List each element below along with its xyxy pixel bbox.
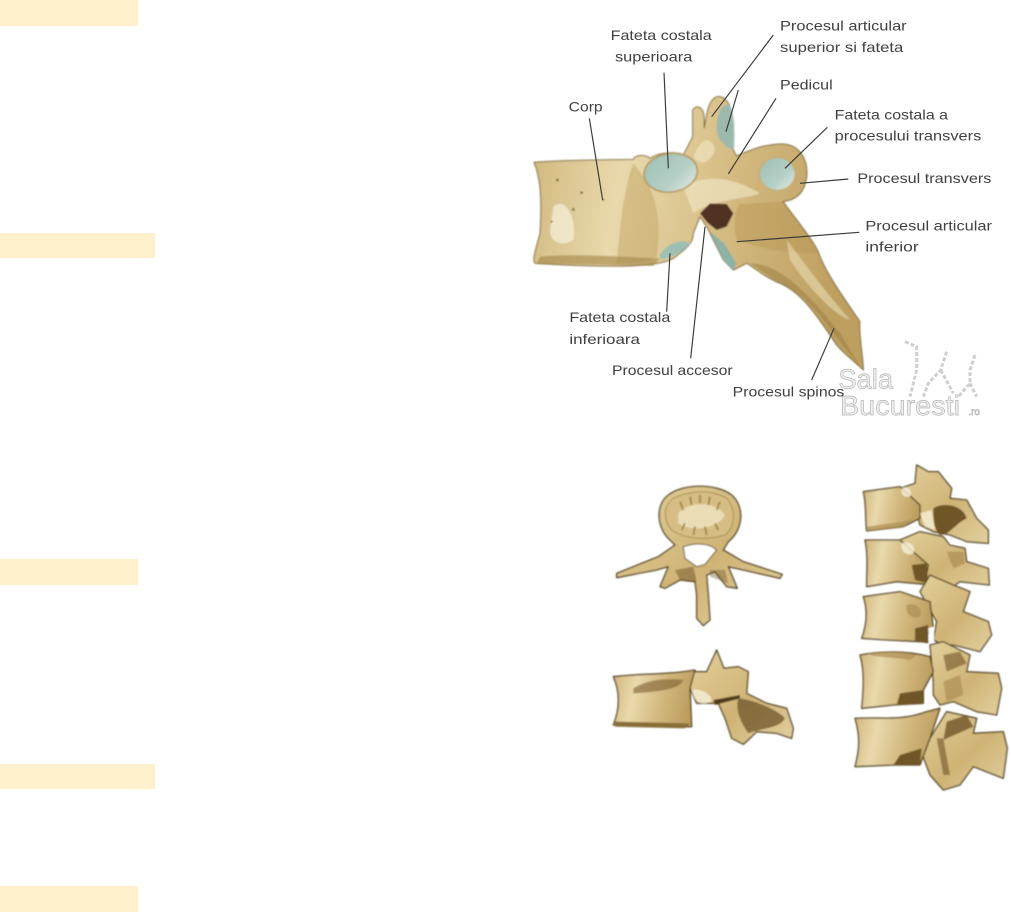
bone: lumbar spine column [855, 465, 1007, 790]
watermark: Sala Bucuresti: Sala [838, 363, 894, 394]
facet: inferior articular [710, 232, 737, 270]
labels: Corp [569, 98, 603, 114]
leader lines [589, 35, 859, 380]
labels: superioara [615, 49, 693, 65]
labels: superior si fateta [780, 39, 904, 55]
vertebral notch [700, 203, 733, 230]
labels: inferioara [569, 331, 640, 347]
facet: superior costal [642, 150, 700, 196]
labels: Procesul articular [865, 217, 992, 233]
labels [569, 18, 992, 400]
watermark: Sala Bucuresti: Bucuresti [840, 390, 960, 421]
vertebra L5 [855, 708, 1007, 790]
lumbar vertebrae illustrations [613, 465, 1007, 790]
highlight bar 5 [0, 886, 138, 912]
labels: inferior [865, 239, 919, 255]
labels: Procesul accesor [612, 362, 733, 378]
facet: inferior costal [659, 241, 691, 259]
labels: Fateta costala [569, 309, 671, 325]
labels: procesului transvers [835, 128, 981, 144]
labels: Fateta costala a [835, 106, 948, 122]
labels: Pedicul [780, 76, 833, 92]
bone: lumbar vertebra superior view [617, 486, 782, 626]
highlight bar 4 [0, 764, 155, 789]
highlight bar 1 [0, 0, 138, 26]
labels: Procesul articular [780, 18, 907, 34]
vertebra L4 [860, 642, 1002, 715]
bone: thoracic vertebra [534, 96, 863, 370]
labels: Procesul transvers [857, 170, 991, 186]
highlight bar 2 [0, 233, 155, 258]
facet: superior articular [717, 105, 734, 150]
vertebra L2 [865, 532, 989, 588]
watermark: Sala Bucuresti: .ro [968, 407, 980, 418]
vertebra L3 [862, 575, 992, 652]
bone: lumbar vertebra lateral view [613, 650, 793, 744]
facet: transverse process [759, 157, 795, 191]
labels: Fateta costala [611, 27, 712, 43]
nutrient foramina on body [551, 179, 604, 223]
watermark: Sala Bucuresti [838, 342, 980, 421]
vertebra L1 [863, 465, 988, 543]
labels: Procesul spinos [733, 384, 844, 400]
highlight bar 3 [0, 559, 138, 585]
labelled lateral view of thoracic vertebra [534, 18, 992, 421]
